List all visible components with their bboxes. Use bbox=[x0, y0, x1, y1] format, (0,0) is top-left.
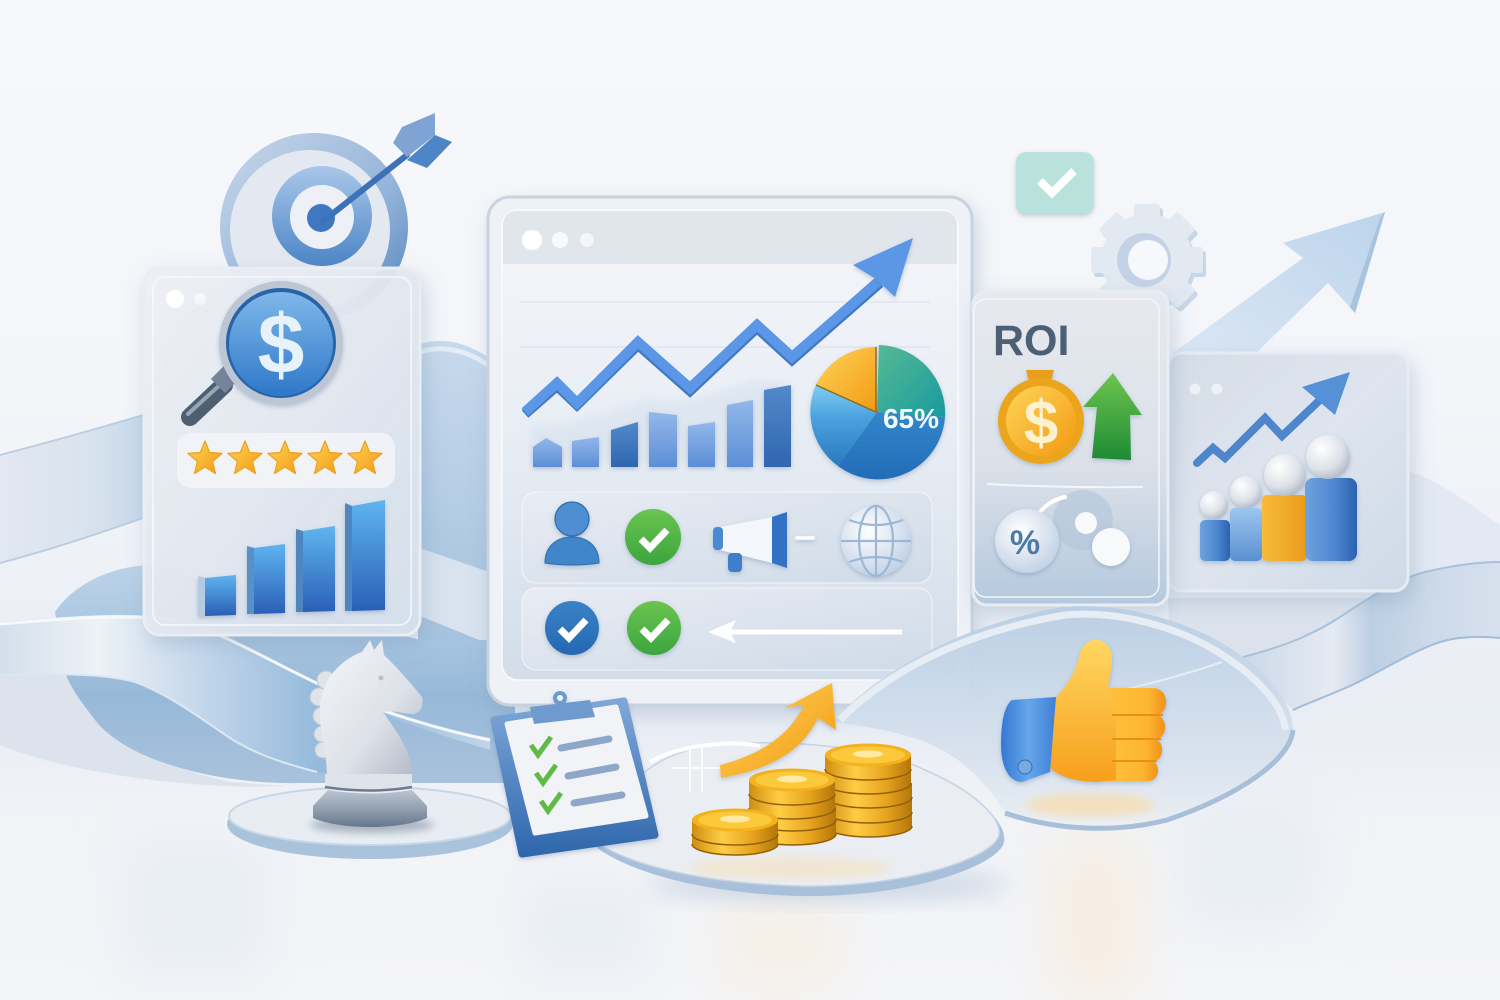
window dots bbox=[522, 230, 594, 250]
icon: green up arrow bbox=[1083, 373, 1142, 460]
panel: ROI card bbox=[973, 291, 1168, 605]
blue ribbon swoop bbox=[55, 565, 515, 783]
icon: megaphone bbox=[713, 512, 813, 572]
icon: clipboard checklist bbox=[494, 691, 655, 854]
icon: magnifier with dollar bbox=[188, 281, 343, 417]
icon: sparkle bbox=[672, 748, 735, 792]
icon: percent bubble: % bbox=[1010, 524, 1040, 562]
icon: gold coin stacks bbox=[692, 744, 912, 855]
front stack bbox=[692, 808, 778, 855]
icon: check badge bbox=[1016, 152, 1094, 214]
row: checks and arrow bbox=[522, 588, 932, 670]
window dots bbox=[166, 290, 206, 308]
panel: central dashboard bbox=[488, 197, 972, 705]
window dots bbox=[1190, 384, 1222, 394]
people bars bbox=[1200, 435, 1357, 561]
glass disc left bbox=[227, 787, 513, 859]
icon: thumbs up bbox=[1001, 640, 1166, 782]
checklist items bbox=[531, 737, 561, 811]
line chart with arrow bbox=[1197, 372, 1350, 463]
bar chart bbox=[533, 385, 791, 467]
floor reflections bbox=[120, 800, 1320, 1000]
icon: money bag coin bbox=[998, 370, 1084, 464]
icon: blue check bbox=[545, 601, 599, 655]
panel: right chart card bbox=[1168, 353, 1408, 591]
glass disc centre bbox=[597, 743, 1010, 899]
arrow: left bbox=[708, 620, 902, 643]
icon: magnifier with dollar: $ bbox=[258, 297, 304, 391]
big background arrow bbox=[1173, 212, 1385, 353]
icon: percent bubble bbox=[995, 490, 1130, 573]
right stack bbox=[825, 744, 912, 837]
icon: green check bbox=[627, 601, 681, 655]
icon: chess knight bbox=[310, 640, 434, 833]
middle stack bbox=[749, 768, 836, 845]
mane bbox=[310, 671, 335, 758]
icon: target with arrow bbox=[220, 113, 452, 321]
rating stars bbox=[177, 433, 395, 488]
row: icons bbox=[522, 492, 932, 583]
area under line chart bbox=[530, 380, 790, 462]
bar chart bbox=[198, 500, 385, 616]
panel: left card bbox=[144, 268, 420, 635]
heading: ROI: ROI bbox=[993, 317, 1069, 365]
fingers bbox=[1096, 688, 1166, 781]
front ribbon right bbox=[1243, 562, 1500, 710]
pie chart 65%: 65% bbox=[883, 403, 939, 434]
pie chart 65% bbox=[810, 345, 945, 479]
arrow: gold up bbox=[720, 683, 836, 778]
line chart with arrow bbox=[525, 238, 913, 414]
glass lens platform bbox=[832, 606, 1293, 828]
icon: green check bbox=[625, 509, 681, 565]
icon: person bbox=[545, 502, 599, 565]
icon: money bag coin: $ bbox=[1024, 389, 1058, 458]
background ribbons bbox=[0, 341, 1500, 760]
front ribbon left bbox=[0, 615, 490, 775]
icon: gear bbox=[1091, 204, 1206, 320]
grey ribbon shadow bbox=[0, 673, 285, 787]
icon: globe bbox=[841, 506, 911, 576]
